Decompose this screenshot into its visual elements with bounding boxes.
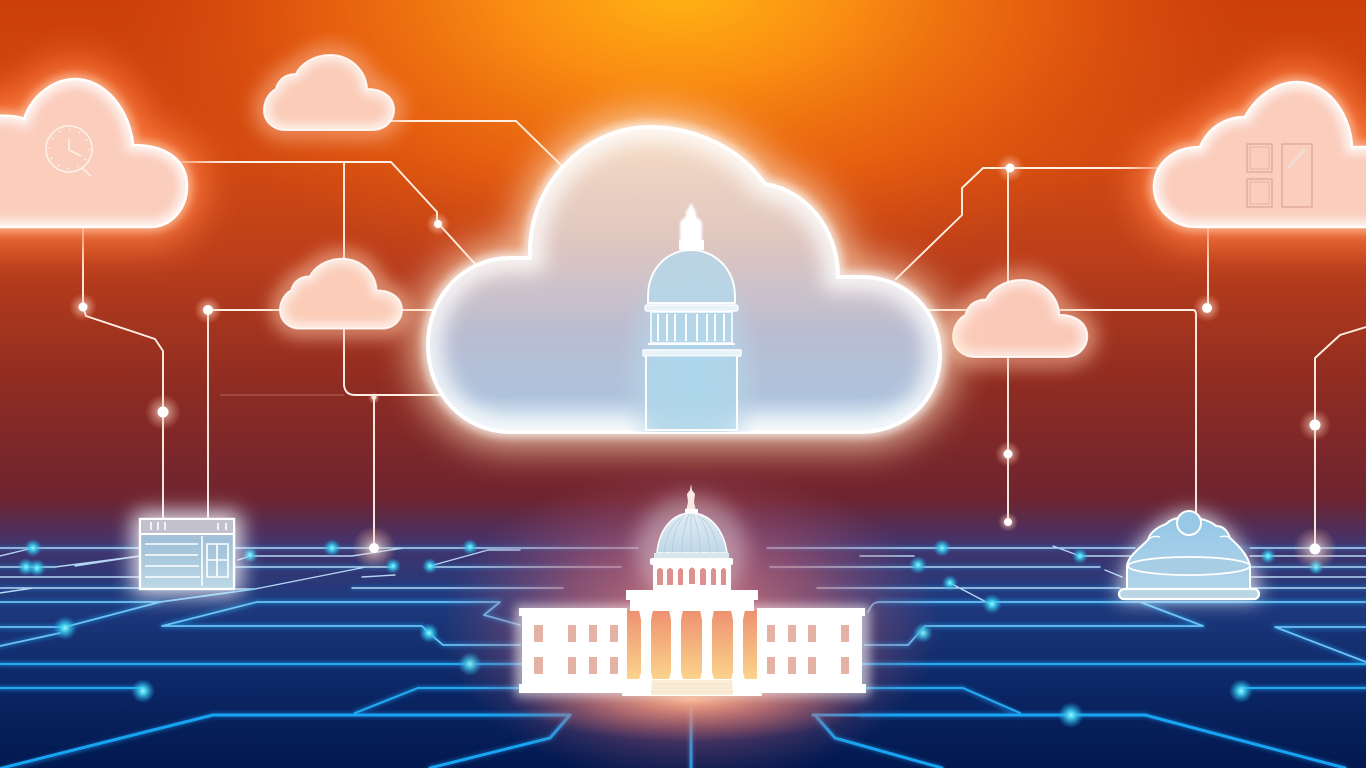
large cloud right with panels icon: [1154, 82, 1366, 227]
icon: clock with magnifier: [46, 126, 92, 176]
small cloud left: [280, 259, 402, 329]
thin upper circuit traces: [0, 546, 1366, 604]
connector nodes: [69, 154, 1337, 571]
portico: [622, 590, 762, 696]
connector lines between clouds: [83, 121, 1366, 548]
capitol tower icon: [633, 203, 750, 432]
dome cover icon: [1119, 511, 1259, 600]
capitol building: [519, 484, 866, 696]
mid circuit traces: [0, 589, 1366, 662]
bottom bright traces: [0, 708, 1345, 768]
dome: [650, 484, 733, 591]
small cloud right: [953, 280, 1087, 357]
browser window icon: [132, 511, 242, 596]
capitol glow: [441, 465, 941, 768]
wing windows: [534, 625, 849, 674]
wings: [519, 608, 866, 693]
circuit nodes: [17, 539, 1324, 728]
circuit board network: [0, 546, 1366, 768]
circuit glow: [0, 548, 1366, 768]
lower bright circuit traces: [0, 664, 1366, 713]
main cloud with capitol tower: [428, 127, 940, 497]
large cloud left with clock icon: [0, 79, 187, 227]
small cloud top: [264, 55, 394, 130]
icon: document panels: [1247, 144, 1312, 207]
